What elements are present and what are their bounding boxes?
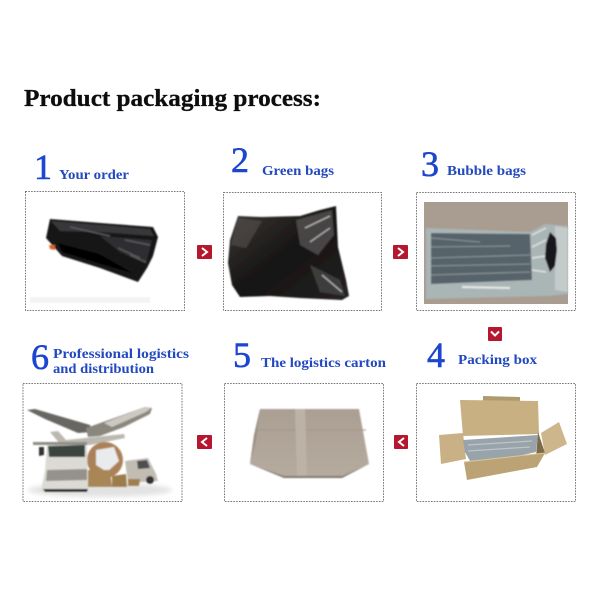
step 2 heading: [231, 140, 335, 180]
panel: step 6 logistics: [23, 337, 190, 502]
photo: plane truck globe van: [27, 407, 172, 497]
panel: step 3 bubble bags: [416, 144, 576, 310]
step 1 heading: Your order: [59, 168, 129, 183]
frame 4: [416, 384, 576, 502]
step 6 heading: [31, 337, 190, 377]
step 6 heading: Professional logistics: [53, 347, 190, 362]
photo: bubble bag: [424, 202, 568, 304]
step 2 heading: 2: [231, 140, 249, 180]
arrow: left 4 to 5: [394, 435, 408, 449]
frame 2: [224, 192, 382, 310]
title: Product packaging process:: [24, 85, 321, 112]
step 5 heading: [233, 335, 386, 375]
arrow: right 2 to 3: [393, 245, 408, 259]
icon: toner cartridge: [46, 219, 158, 282]
step 5 heading: 5: [233, 335, 251, 375]
panel: step 5 carton: [224, 335, 386, 502]
panel: step 1 your order: [26, 147, 184, 310]
frame 5: [224, 384, 384, 502]
frame 1: [26, 192, 184, 310]
step 1 heading: 1: [34, 147, 52, 187]
arrow: down 3 to 4: [488, 327, 502, 341]
photo: open packing box: [439, 396, 567, 480]
step 3 heading: Bubble bags: [447, 164, 527, 179]
step 2 heading: Green bags: [262, 164, 335, 179]
arrow: right 1 to 2: [197, 245, 212, 259]
step 4 heading: 4: [427, 335, 445, 375]
step 5 heading: The logistics carton: [261, 356, 386, 371]
step 1 heading: [34, 147, 129, 187]
step 6 heading: and distribution: [53, 362, 154, 377]
step 4 heading: [427, 335, 537, 375]
step 3 heading: 3: [421, 144, 439, 184]
arrow: left 5 to 6: [197, 435, 212, 449]
frame 6: [23, 384, 182, 502]
panel: step 2 green bags: [224, 140, 382, 310]
panel: step 4 packing box: [416, 335, 576, 502]
step 6 heading: 6: [31, 337, 49, 377]
frame 3: [416, 192, 576, 310]
photo: cardboard carton: [250, 409, 369, 478]
icon: black bag: [228, 206, 349, 300]
step 3 heading: [421, 144, 527, 184]
photo shadow strip: [30, 297, 150, 303]
step 4 heading: Packing box: [458, 353, 537, 368]
